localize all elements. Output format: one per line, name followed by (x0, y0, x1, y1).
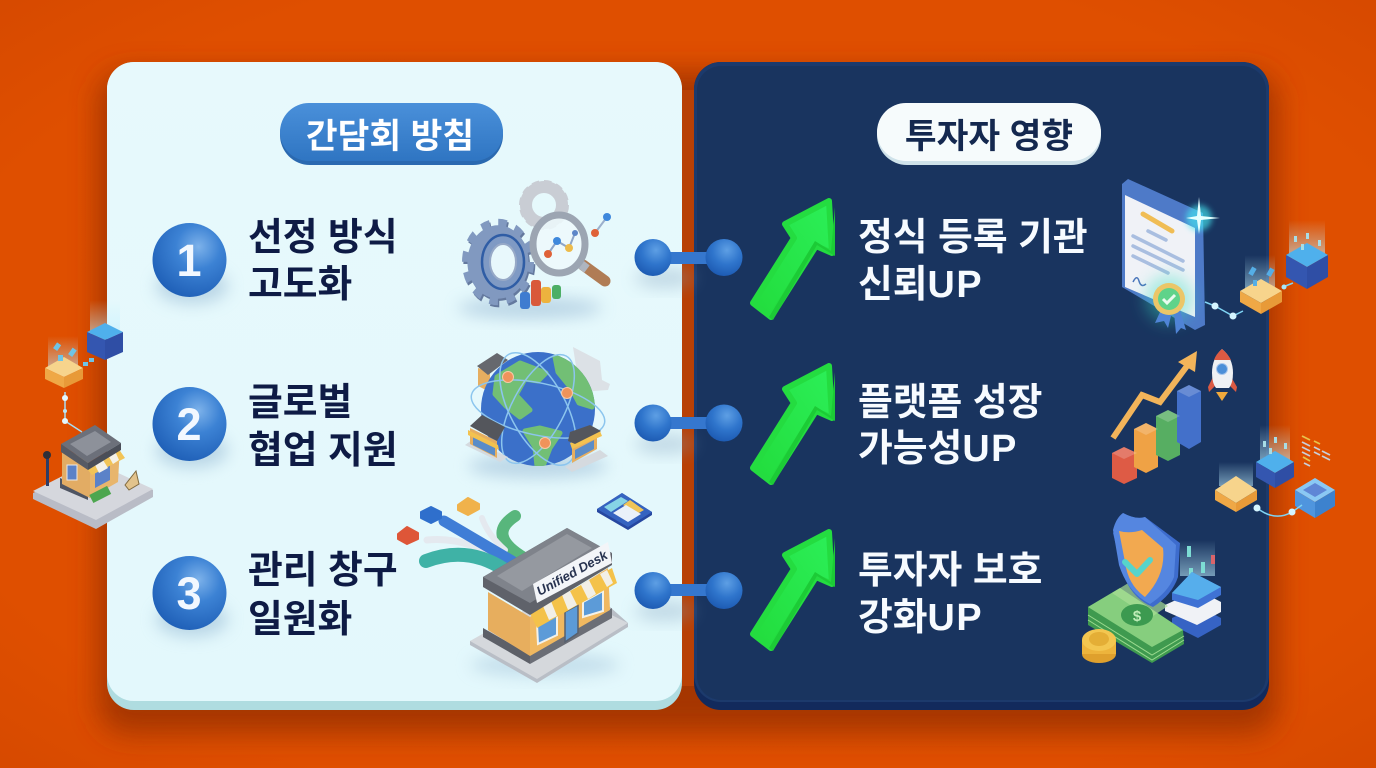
effect text 3: 투자자 보호 (858, 550, 1042, 592)
icon: globe with connected shops (465, 341, 610, 478)
icon: cubes and data links, top right (1205, 220, 1328, 320)
effect text 2: 가능성UP (858, 428, 1018, 470)
icon: shield, money and server (1082, 513, 1221, 663)
icon: shield, money and server: $ (1133, 608, 1142, 625)
item text 3: 일원화 (248, 599, 352, 641)
connector 3 (634, 572, 742, 621)
item text 1: 고도화 (248, 264, 352, 306)
arrow 1 (753, 201, 835, 320)
effect text 1: 정식 등록 기관 (858, 217, 1088, 259)
connector 1 (634, 239, 742, 288)
heading pill: 투자자 영향 (877, 103, 1101, 165)
heading pill: 간담회 방침: 간담회 방침 (306, 118, 474, 156)
icon: shop and cubes, left (33, 300, 153, 529)
icon: rocket (1208, 349, 1237, 401)
number badge 3 (152, 556, 226, 630)
item 1: 선정 방식 고도화 (152, 217, 398, 306)
calculator (597, 493, 652, 530)
connector 2 (634, 404, 742, 454)
effect text 3: 강화UP (858, 597, 983, 639)
number badge 2: 2 (176, 399, 202, 450)
arrow 2 (753, 366, 835, 485)
icon: gears and magnifier with chart (458, 183, 611, 319)
number badge 1: 1 (176, 235, 202, 286)
panel shadows (98, 72, 1278, 734)
gap between panels (680, 90, 696, 686)
item 2: 글로벌 협업 지원 (152, 382, 398, 472)
number badge 1 (152, 223, 226, 297)
panel: 투자자 영향 (694, 62, 1269, 710)
effect text 1: 신뢰UP (858, 264, 983, 306)
item text 3: 관리 창구 (248, 550, 398, 592)
icon: certificate with seal (1122, 179, 1220, 334)
effect text 2: 플랫폼 성장 (858, 382, 1042, 424)
number badge 2 (152, 387, 226, 461)
item 3: 관리 창구 일원화 (152, 550, 398, 641)
icon: Unified Desk store (398, 493, 652, 683)
arrow 3 (753, 532, 835, 651)
pipes and keys (426, 516, 524, 570)
heading pill: 간담회 방침 (280, 103, 503, 165)
item text 2: 협업 지원 (248, 430, 398, 472)
heading pill: 투자자 영향: 투자자 영향 (905, 118, 1073, 156)
item text 1: 선정 방식 (248, 217, 398, 259)
item text 2: 글로벌 (248, 382, 352, 424)
sign: Unified Desk: Unified Desk (534, 547, 611, 599)
panel: 간담회 방침 (107, 62, 682, 710)
number badge 3: 3 (176, 568, 202, 619)
icon: growth bar chart with arrow (1112, 351, 1201, 484)
icon: cubes and data links, middle right (1215, 425, 1335, 518)
